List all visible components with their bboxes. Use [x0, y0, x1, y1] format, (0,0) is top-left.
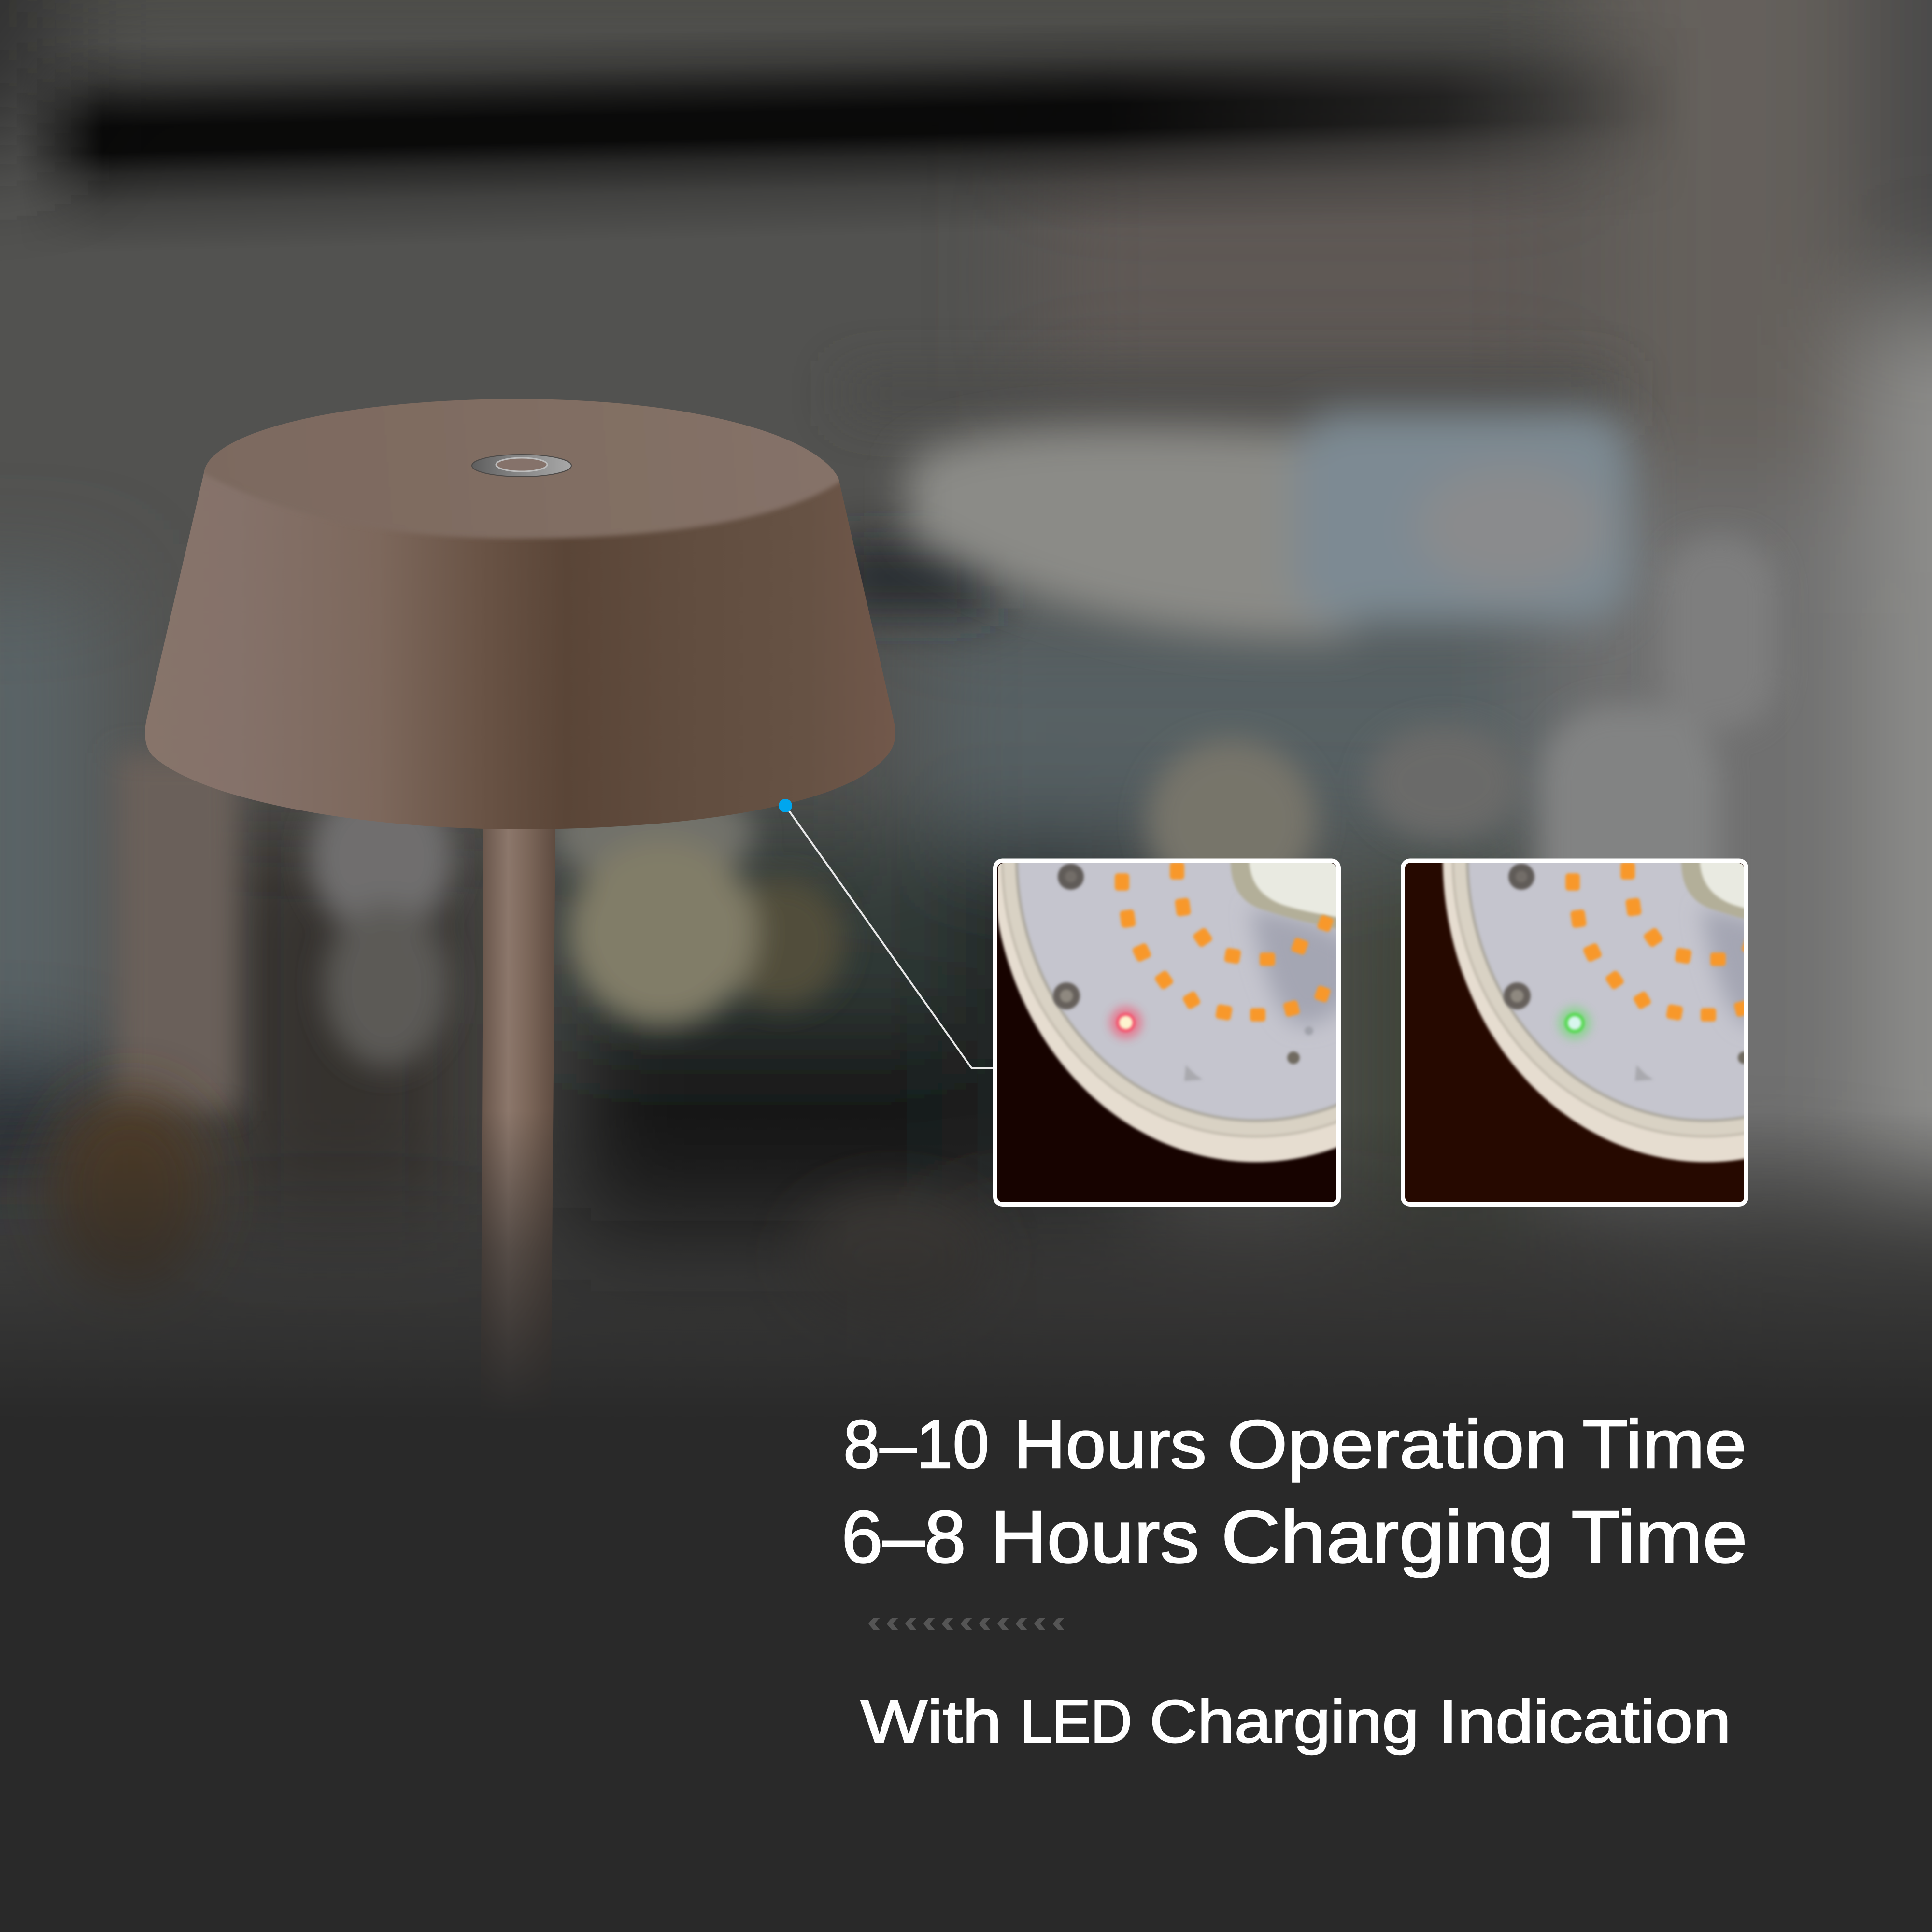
heading: operation time: Operation	[1227, 1406, 1567, 1483]
green LED	[1558, 1007, 1591, 1039]
heading: operation time: Hours	[1013, 1406, 1207, 1483]
heading: operation time	[843, 1406, 1747, 1483]
heading: charging time: 6–8	[841, 1495, 966, 1578]
leader line	[785, 806, 993, 1068]
red LED	[1109, 1006, 1142, 1039]
decorative chevron row	[868, 1618, 1065, 1630]
shade side	[145, 399, 895, 829]
icon: blue anchor dot	[779, 799, 792, 812]
lamp shade	[145, 386, 895, 829]
heading: operation time: 8–10	[843, 1406, 989, 1483]
shade top face	[196, 386, 845, 539]
text: LED charging indication: Indication	[1438, 1688, 1731, 1755]
text: LED charging indication: LED	[1020, 1688, 1132, 1755]
heading: operation time: Time	[1582, 1406, 1747, 1483]
dark fade panel at bottom	[0, 1111, 1932, 1932]
heading: charging time: Hours	[990, 1495, 1199, 1578]
blurred photo background	[0, 0, 1932, 1348]
text: LED charging indication	[861, 1688, 1731, 1755]
photo card: green charged LED	[1403, 553, 1932, 1205]
icon: touch button ring	[472, 455, 571, 477]
photo card: red charging LED	[992, 553, 1520, 1205]
heading: charging time	[841, 1495, 1747, 1578]
dark ceiling band	[30, 33, 1656, 229]
lamp stem	[481, 821, 555, 1449]
heading: charging time: Time	[1571, 1495, 1747, 1578]
text: LED charging indication: Charging	[1150, 1688, 1419, 1755]
text: LED charging indication: With	[861, 1688, 1002, 1755]
heading: charging time: Charging	[1221, 1495, 1554, 1578]
